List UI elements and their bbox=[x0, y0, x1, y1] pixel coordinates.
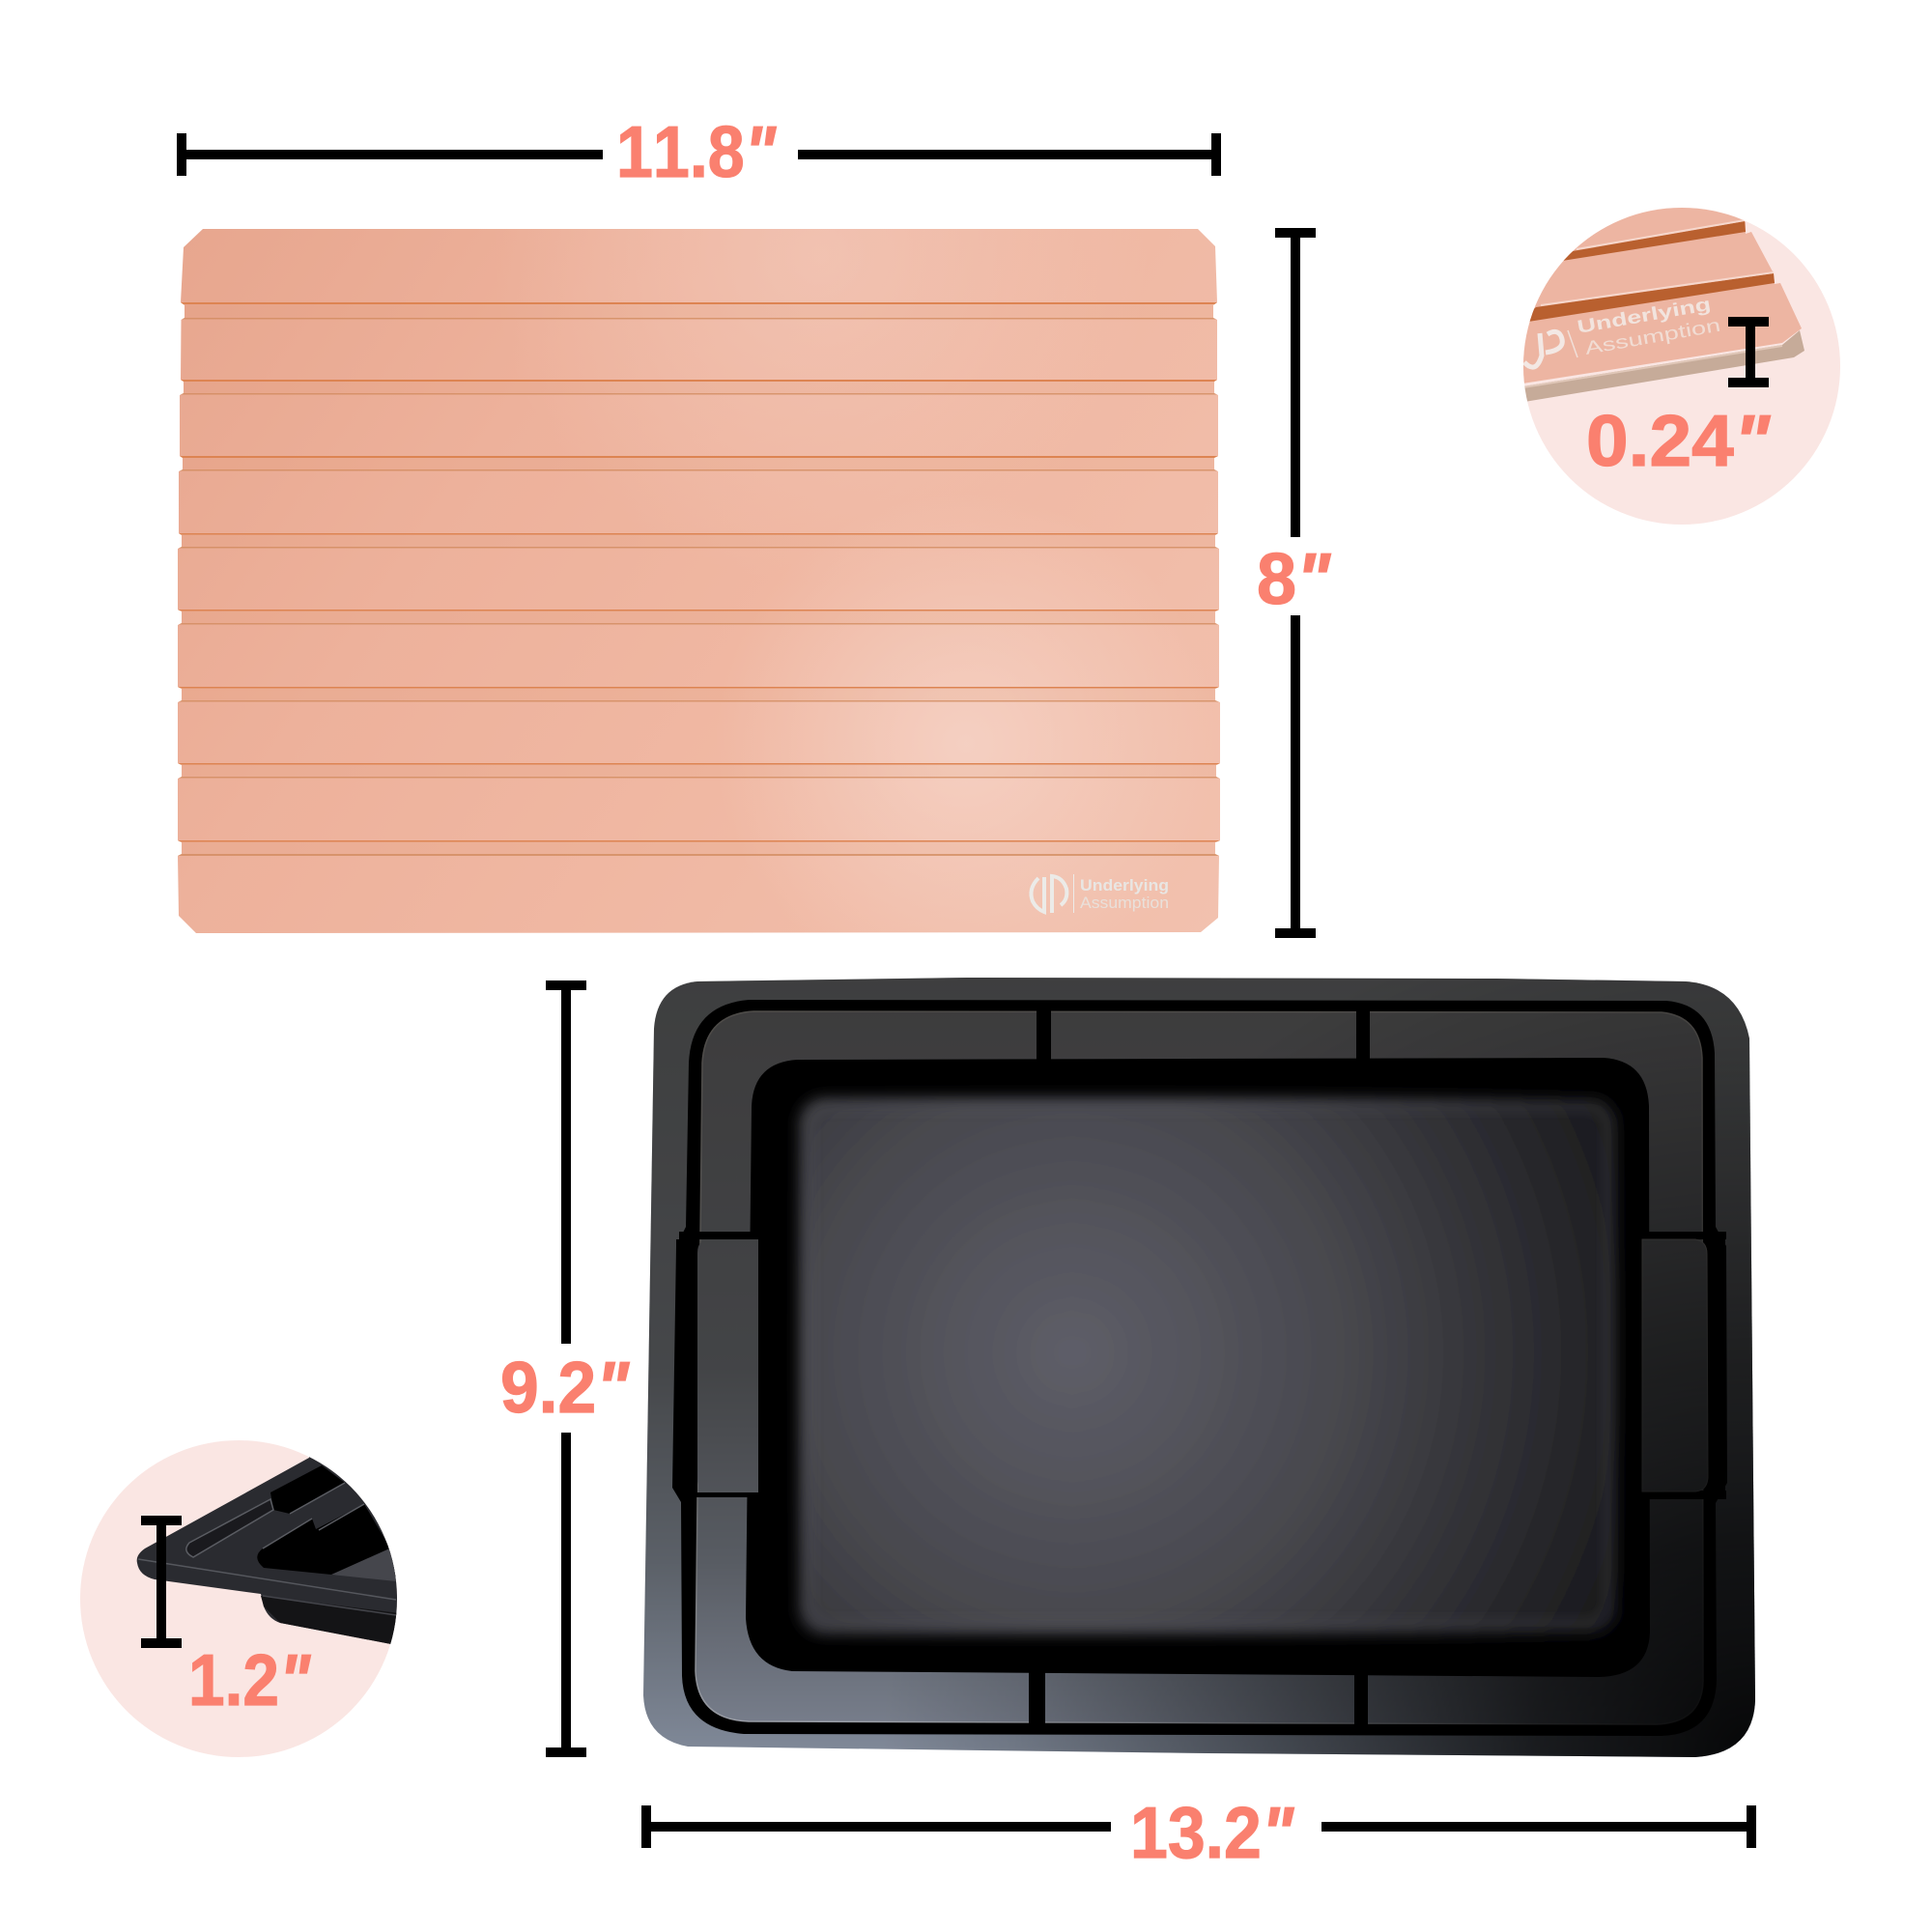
callout: plate thickness bbox=[1517, 198, 1840, 525]
right handle recess bbox=[1637, 1232, 1726, 1499]
dimension: plate width bbox=[177, 111, 1221, 192]
callout: tray height: 1.2" bbox=[188, 1639, 311, 1720]
callout circle bbox=[80, 1440, 397, 1757]
thickness bracket bbox=[1728, 317, 1769, 387]
dimension: plate width: 11.8" bbox=[616, 111, 777, 192]
plate logo: Underlying bbox=[1080, 876, 1169, 895]
tray ledge bbox=[696, 1011, 1703, 1724]
notches bbox=[1029, 1009, 1370, 1727]
black drip tray bbox=[638, 976, 1763, 1763]
callout: tray height bbox=[80, 1440, 415, 1757]
dimension: tray depth: 9.2" bbox=[500, 1347, 630, 1428]
logo mark bbox=[1031, 876, 1066, 913]
tray inner plate bbox=[799, 1097, 1618, 1634]
plate corner close-up bbox=[1517, 198, 1804, 402]
plate corner close-up: Underlying bbox=[1576, 295, 1713, 338]
dimension: plate depth bbox=[1257, 228, 1331, 938]
left handle recess bbox=[676, 1232, 761, 1497]
callout: plate thickness: 0.24" bbox=[1586, 400, 1772, 481]
dimension: tray depth bbox=[500, 980, 630, 1757]
tray corner close-up bbox=[137, 1457, 397, 1644]
dimension: plate depth: 8" bbox=[1257, 538, 1331, 619]
dimension: tray width: 13.2" bbox=[1130, 1792, 1294, 1873]
height bracket bbox=[141, 1516, 182, 1648]
plate logo bbox=[1031, 874, 1169, 913]
plate logo: Assumption bbox=[1080, 894, 1169, 912]
callout circle bbox=[1523, 208, 1840, 525]
pink defrosting plate bbox=[164, 222, 1236, 942]
plate corner close-up: Assumption bbox=[1583, 316, 1722, 359]
tray lighting: dark lower-right corner bbox=[936, 1012, 1755, 1757]
tray lighting: vertical falloff bbox=[638, 976, 1763, 1763]
tray outer lip bbox=[643, 978, 1755, 1757]
tray outer groove bbox=[672, 1000, 1727, 1736]
dimension: tray width bbox=[641, 1792, 1756, 1873]
tray well bbox=[746, 1058, 1650, 1677]
plate edge ridge bbox=[810, 1107, 1607, 1623]
